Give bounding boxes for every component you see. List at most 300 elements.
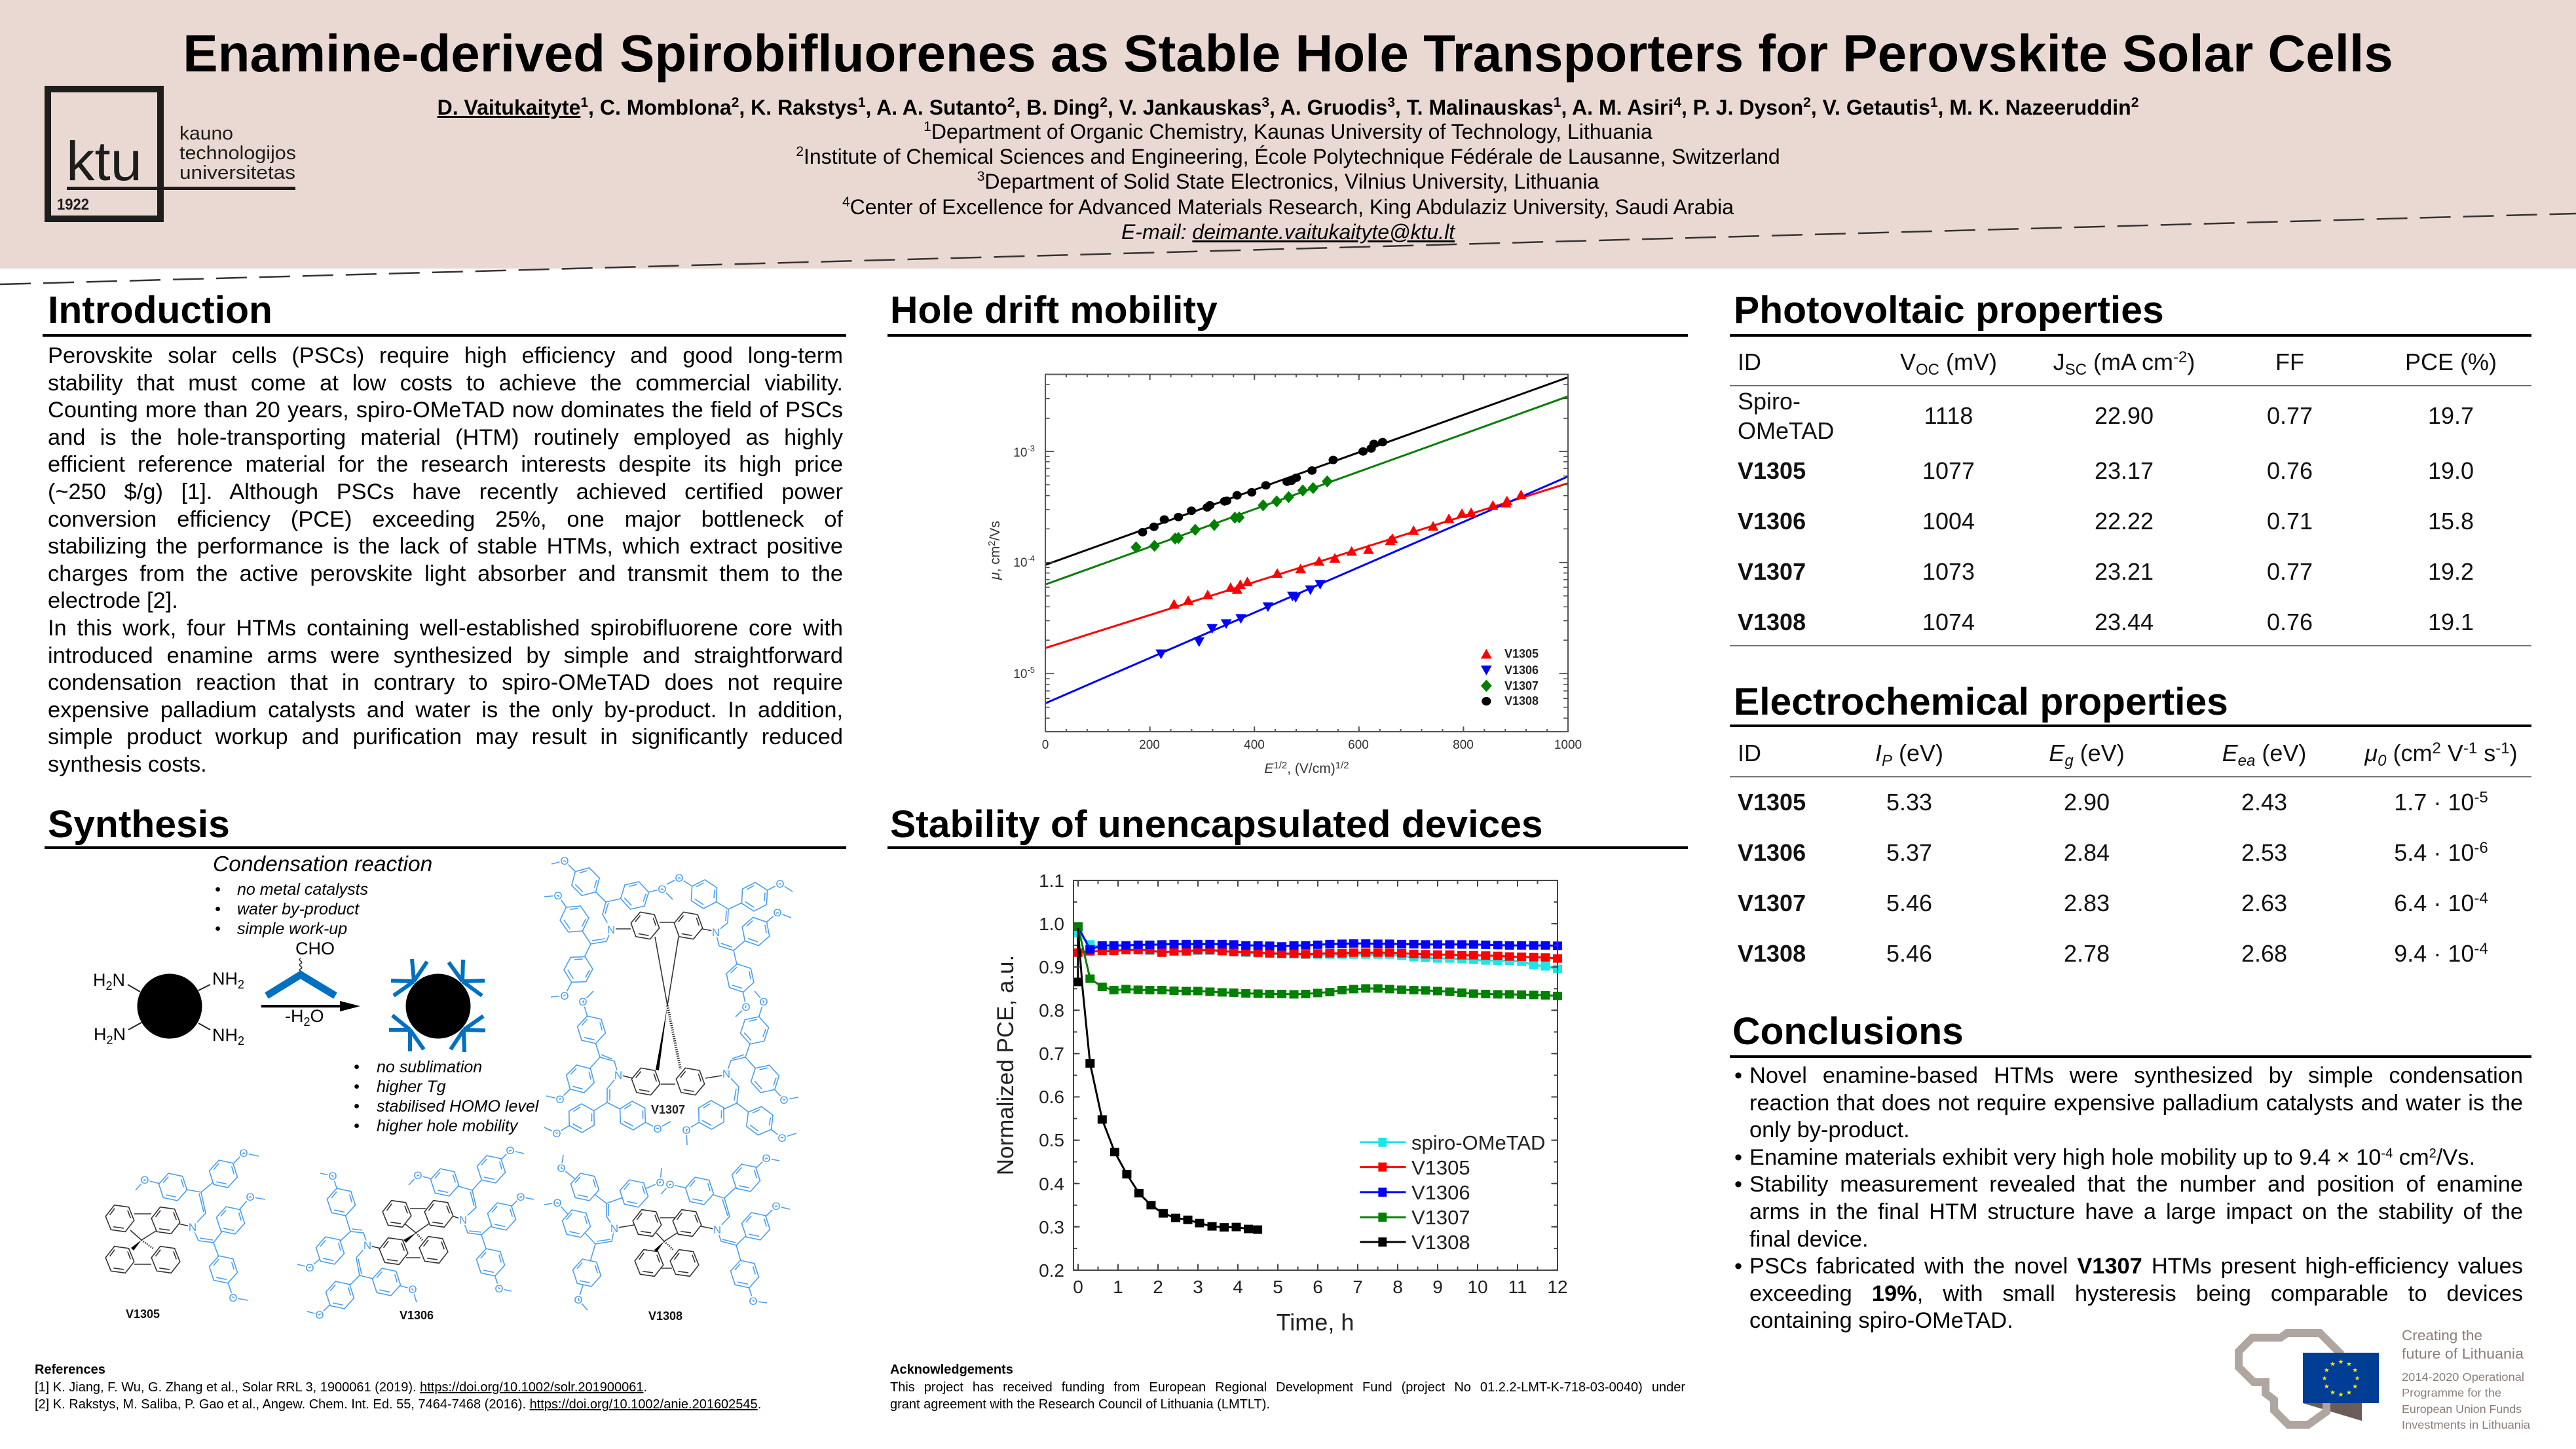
- logo: EU funds: Programme for the: [2402, 1386, 2501, 1399]
- row V1308: 2.68: [2241, 940, 2287, 967]
- series spiro-OMeTAD: [1078, 933, 1558, 969]
- logo: EU funds: [2239, 1327, 2530, 1431]
- axis labels: Normalized PCE, a.u.: [993, 955, 1018, 1175]
- conclusions list: exceeding 19%, with small hysteresis being comparable to devices: [1749, 1281, 2523, 1306]
- introduction text: Counting more than 20 years, spiro-OMeTAD now dominates the field of PSCs: [48, 398, 843, 423]
- product benefits list: •: [354, 1097, 360, 1116]
- product benefits list: stabilised HOMO level: [377, 1097, 540, 1116]
- logo: KTU: technologijos: [179, 143, 296, 164]
- introduction text: (~250 $/g) [1]. Although PSCs have recently achieved certified power: [48, 480, 843, 504]
- reactant: amine core: N: [113, 970, 125, 990]
- molecule: V1305: O: [140, 1174, 149, 1186]
- row V1307: 0.77: [2267, 558, 2313, 585]
- product benefits list: higher hole mobility: [377, 1117, 519, 1135]
- reaction arrow: [261, 1001, 360, 1011]
- reagent label: 2: [304, 1015, 310, 1028]
- table: photovoltaic properties: [1730, 348, 2531, 646]
- product benefits list: •: [354, 1058, 360, 1076]
- molecule: V1306: O: [315, 1309, 324, 1321]
- axis labels: 0.2: [1039, 1260, 1064, 1281]
- reaction benefits list: [215, 880, 368, 938]
- introduction text: introduced enamine arms were synthesized by simple and straightforward: [48, 643, 843, 668]
- axis labels: 12: [1547, 1277, 1568, 1297]
- row V1306: V1306: [1738, 839, 1806, 866]
- molecule: V1308: O: [656, 1176, 665, 1189]
- reaction benefits list: no metal catalysts: [237, 880, 368, 899]
- row spiro-OMeTAD: [1738, 388, 2474, 444]
- axis labels: , (V/cm): [1287, 761, 1335, 776]
- row V1305: 23.17: [2095, 457, 2154, 484]
- introduction text: efficient reference material for the research interests despite its high price: [48, 452, 843, 477]
- header row: I: [1875, 740, 1882, 766]
- introduction text: electrode [2].: [48, 588, 178, 613]
- reactant: amine core: 2: [238, 1034, 244, 1047]
- molecule: V1307: V1307: [651, 1103, 685, 1116]
- molecule: V1306: O: [408, 1283, 417, 1296]
- condensation reaction scheme: [93, 852, 540, 1135]
- row V1308: [1738, 609, 2474, 635]
- row V1308: 2.78: [2064, 940, 2110, 967]
- header row: V: [1900, 348, 1916, 375]
- molecule: V1308: O: [772, 1200, 781, 1213]
- row V1308: 0.76: [2267, 609, 2313, 635]
- axis labels: 1000: [1554, 738, 1582, 752]
- conclusions list: Stability measurement revealed that the number and position of enamine: [1749, 1172, 2523, 1197]
- molecule: V1306: N: [459, 1214, 467, 1226]
- axis labels: 600: [1348, 738, 1369, 752]
- molecule: V1305: N: [189, 1221, 196, 1233]
- header row: (eV): [1892, 740, 1943, 766]
- header row: -1: [2463, 740, 2477, 757]
- reactant: amine core: H: [93, 970, 106, 990]
- axis labels: 1/2: [1273, 760, 1287, 771]
- molecule: V1308: [544, 1152, 790, 1323]
- conclusions list: final device.: [1749, 1227, 1869, 1252]
- header row: ): [2187, 348, 2195, 375]
- heading: Electrochemical properties: Electrochemical properties: [1734, 681, 2228, 723]
- header row: FF: [2275, 348, 2304, 375]
- series V1308: [1078, 928, 1258, 1230]
- acknowledgements: This project has received funding from European Regional Development Fund (project No 01.2.2-LMT-K-718-03-0040) under: [890, 1380, 1685, 1394]
- row V1305: 5.33: [1886, 789, 1932, 816]
- row V1308: V1308: [1738, 940, 1806, 967]
- row V1308: 5.46: [1886, 940, 1932, 967]
- reactant: amine core: [93, 969, 244, 1047]
- reactant: amine core: 2: [238, 978, 244, 991]
- axis labels: 2: [1153, 1277, 1163, 1297]
- logo: KTU: kauno: [179, 123, 233, 144]
- row V1306: 2.53: [2241, 839, 2287, 866]
- reagent label: O: [310, 1006, 324, 1026]
- molecule: V1307: O: [552, 1127, 561, 1140]
- header row: ID: [1738, 740, 1761, 766]
- row V1307: [1738, 558, 2474, 585]
- legend markers: [1485, 654, 1487, 701]
- plot frame: [1045, 375, 1568, 732]
- axis labels: 800: [1453, 738, 1474, 752]
- molecule: V1305: O: [246, 1191, 255, 1203]
- axis labels: 7: [1353, 1277, 1363, 1297]
- axis labels: 0: [1073, 1277, 1083, 1297]
- logo: KTU: [45, 86, 296, 222]
- molecule: V1308: N: [713, 1224, 721, 1236]
- row V1307: 19.2: [2428, 558, 2474, 585]
- row V1306: [1738, 508, 2474, 535]
- references: [2] K. Rakstys, M. Saliba, P. Gao et al., Angew. Chem. Int. Ed. 55, 7464-7468 (2016). https://doi.org/10.1002/anie.201602545.: [35, 1397, 761, 1412]
- header row: ea: [2238, 752, 2255, 770]
- axis labels: 200: [1139, 738, 1160, 752]
- row spiro-OMeTAD: 1118: [1924, 402, 1973, 429]
- molecule: V1308: O: [665, 1178, 675, 1191]
- header row: E: [2049, 740, 2065, 766]
- row V1307: 2.83: [2064, 890, 2110, 916]
- header row: 2: [2433, 740, 2441, 757]
- series V1306: [1078, 926, 1558, 949]
- row V1306: 0.71: [2267, 508, 2313, 535]
- product benefits list: higher Tg: [377, 1078, 446, 1096]
- header row: -2: [2173, 348, 2187, 366]
- row V1305: 19.0: [2428, 457, 2474, 484]
- reagent label: [285, 939, 335, 1028]
- references: [35, 1363, 761, 1412]
- acknowledgements: Acknowledgements: [890, 1363, 1013, 1377]
- axis labels: -4: [1027, 554, 1035, 563]
- header row: (eV): [2255, 740, 2306, 766]
- introduction text: In this work, four HTMs containing well-established spirobifluorene core with: [48, 616, 843, 641]
- legend labels: V1307: [1504, 679, 1539, 692]
- molecule: V1307: O: [682, 1124, 691, 1137]
- axis labels: 0.8: [1039, 1000, 1064, 1021]
- molecule: V1307: O: [658, 883, 667, 895]
- row spiro-OMeTAD: Spiro-: [1738, 388, 1801, 415]
- axis labels: 2: [986, 540, 998, 546]
- molecule: V1306: O: [495, 1283, 504, 1295]
- molecule: V1307: O: [578, 996, 588, 1008]
- conclusions list: reaction that does not require expensive palladium catalysts and water is the: [1749, 1091, 2523, 1116]
- product benefits list: •: [354, 1117, 360, 1135]
- row V1307: 6.4 · 10: [2394, 890, 2474, 916]
- row V1306: -6: [2474, 839, 2488, 857]
- row V1305: 2.43: [2241, 789, 2287, 816]
- header row: P: [1882, 752, 1892, 770]
- product benefits list: •: [354, 1078, 360, 1096]
- heading rules: [43, 334, 2531, 1058]
- axis labels: /Vs: [988, 521, 1003, 540]
- affiliation 4: 4Center of Excellence for Advanced Materials Research, King Abdulaziz University, Saudi Arabia: [842, 195, 1734, 219]
- row V1305: 1.7 · 10: [2394, 789, 2474, 816]
- reactant: amine core: NH: [212, 1025, 238, 1045]
- axis labels: 3: [1193, 1277, 1203, 1297]
- legend line keys: [1360, 1138, 1406, 1247]
- header row: E: [2222, 740, 2239, 766]
- reaction benefits list: simple work-up: [237, 920, 347, 938]
- axis labels: 400: [1244, 738, 1265, 752]
- contact e-mail: E-mail: deimante.vaitukaityte@ktu.lt: [1121, 220, 1455, 244]
- axis labels: 1: [1113, 1277, 1123, 1297]
- molecule: V1307: O: [560, 990, 569, 1002]
- header row: [1738, 348, 2497, 379]
- molecule: V1307: N: [607, 924, 615, 936]
- molecule: V1306: N: [364, 1239, 371, 1252]
- row spiro-OMeTAD: 22.90: [2095, 402, 2154, 429]
- axis labels: 1.1: [1039, 871, 1064, 891]
- axis labels: 0.4: [1039, 1174, 1064, 1194]
- acknowledgements: [890, 1363, 1685, 1412]
- axis labels: Time, h: [1277, 1309, 1354, 1336]
- row V1305: V1305: [1738, 457, 1806, 484]
- axis labels: [993, 871, 1568, 1336]
- heading: Photovoltaic properties: Photovoltaic properties: [1734, 289, 2164, 331]
- references: References: [35, 1363, 105, 1377]
- product benefits list: [354, 1058, 540, 1135]
- molecule: V1306: O: [413, 1169, 422, 1182]
- reagent label: CHO: [295, 939, 335, 958]
- molecule: V1306: O: [506, 1144, 515, 1157]
- data points V1306: [1161, 584, 1320, 654]
- axis labels: μ, cm: [988, 546, 1003, 580]
- axis labels: E: [1264, 761, 1274, 776]
- molecule: V1307: O: [741, 1001, 751, 1013]
- molecule: V1307: O: [653, 1123, 662, 1135]
- molecule: V1308: O: [553, 1197, 562, 1209]
- authors: D. Vaitukaityte1, C. Momblona2, K. Rakstys1, A. A. Sutanto2, B. Ding2, V. Jankauskas3, A. Gruodis3, T. Malinauskas1, A. M. Asiri4, P. J. Dyson2, V. Getautis1, M. K. Nazeeruddin2: [438, 95, 2138, 119]
- molecule: V1308: O: [557, 1162, 566, 1175]
- logo: EU funds: 2014-2020 Operational: [2402, 1370, 2524, 1383]
- legend labels: V1305: [1411, 1156, 1470, 1179]
- row V1308: -4: [2474, 940, 2488, 958]
- row V1306: V1306: [1738, 508, 1806, 535]
- legend labels: V1306: [1411, 1181, 1470, 1204]
- axis labels: 0.5: [1039, 1130, 1064, 1150]
- row V1305: 2.90: [2064, 789, 2110, 816]
- introduction text: synthesis costs.: [48, 752, 207, 777]
- conclusions list: [1735, 1063, 2523, 1333]
- row V1308: [1738, 940, 2488, 967]
- axis labels: 11: [1508, 1277, 1527, 1297]
- header row: (eV): [2074, 740, 2125, 766]
- row V1308: 9.4 · 10: [2394, 940, 2474, 967]
- introduction text: simple product workup and purification may result in significantly reduced: [48, 724, 843, 749]
- reaction benefits list: water by-product: [237, 900, 360, 918]
- axis labels: 8: [1392, 1277, 1403, 1297]
- row V1305: 1077: [1922, 457, 1975, 484]
- legend labels: [1411, 1131, 1545, 1254]
- axis labels: 5: [1273, 1277, 1283, 1297]
- axis labels: 9: [1432, 1277, 1443, 1297]
- axis labels: 10: [1013, 446, 1027, 460]
- reactant: amine core: 2: [106, 1034, 113, 1047]
- row V1307: [1738, 890, 2488, 916]
- dashed divider line: [0, 214, 2576, 284]
- reaction benefits list: •: [215, 880, 221, 899]
- molecule: V1308: V1308: [648, 1309, 682, 1323]
- row V1307: 1073: [1922, 558, 1975, 585]
- reaction title: Condensation reaction: [213, 852, 432, 876]
- reagent label: -H: [285, 1006, 304, 1026]
- conclusions list: only by-product.: [1749, 1118, 1910, 1142]
- row V1307: 5.46: [1886, 890, 1932, 916]
- molecule: V1305: [104, 1147, 265, 1321]
- molecule: V1307: N: [722, 1068, 730, 1080]
- molecule: V1306: O: [328, 1170, 337, 1182]
- conclusions list: containing spiro-OMeTAD.: [1749, 1308, 2013, 1333]
- molecule: V1307: O: [775, 878, 785, 890]
- molecule: V1307: O: [779, 1094, 789, 1106]
- header row: μ: [2364, 740, 2378, 766]
- affiliation 1: 1Department of Organic Chemistry, Kaunas University of Technology, Lithuania: [924, 119, 1652, 143]
- header row: V: [2441, 740, 2463, 766]
- axis labels: 0.9: [1039, 957, 1064, 977]
- axis labels: 10: [1013, 556, 1027, 570]
- introduction text: Perovskite solar cells (PSCs) require high efficiency and good long-term: [48, 343, 843, 368]
- molecule: V1308: O: [574, 1294, 583, 1306]
- series V1305: [1078, 950, 1558, 958]
- legend labels: V1306: [1504, 664, 1539, 677]
- axis labels: 6: [1313, 1277, 1323, 1297]
- header row: OC: [1916, 361, 1939, 379]
- row V1308: 1074: [1922, 609, 1975, 635]
- product: enamine core: [389, 959, 485, 1052]
- logo: EU funds: European Union Funds: [2402, 1402, 2522, 1416]
- conclusions list: arms in the final HTM structure have a large impact on the stability of the: [1749, 1199, 2523, 1224]
- axis labels: 4: [1233, 1277, 1243, 1297]
- logo: EU funds: Creating the: [2402, 1327, 2482, 1344]
- header row: s: [2477, 740, 2495, 766]
- logo: KTU: 1922: [57, 196, 89, 214]
- molecule: V1308: O: [762, 1152, 771, 1165]
- header row: (mA cm: [2087, 348, 2173, 375]
- reaction benefits list: •: [215, 900, 221, 918]
- aldehyde chevron: [267, 958, 335, 996]
- affiliation 2: 2Institute of Chemical Sciences and Engineering, École Polytechnique Fédérale de Lausanne, Switzerland: [796, 144, 1780, 168]
- header row: SC: [2065, 361, 2087, 379]
- molecule: V1307: O: [555, 1093, 565, 1106]
- header row: ID: [1738, 348, 1761, 375]
- row V1308: 19.1: [2428, 609, 2474, 635]
- legend labels: V1305: [1504, 647, 1539, 660]
- heading: Hole drift mobility: Hole drift mobility: [890, 289, 1218, 331]
- molecule: V1307: [544, 855, 798, 1145]
- introduction text: [48, 343, 844, 777]
- header row: [1738, 740, 2518, 770]
- molecule: V1307: O: [777, 1132, 787, 1144]
- header band: [0, 0, 2576, 269]
- legend labels: V1308: [1411, 1231, 1470, 1254]
- header row: -1: [2495, 740, 2510, 757]
- chart: hole drift mobility: [986, 374, 1582, 776]
- reactant: amine core: 2: [106, 979, 113, 992]
- product benefits list: no sublimation: [377, 1058, 482, 1076]
- conclusions list: Novel enamine-based HTMs were synthesized by simple condensation: [1749, 1063, 2523, 1088]
- log y minor ticks: [1045, 374, 1568, 718]
- row V1306: [1738, 839, 2488, 866]
- heading: Synthesis: Synthesis: [48, 803, 230, 846]
- logo: EU funds: Investments in Lithuania: [2402, 1418, 2530, 1431]
- reactant: amine core: NH: [212, 969, 238, 988]
- row V1305: V1305: [1738, 789, 1806, 816]
- chart: stability: [993, 871, 1568, 1336]
- data points V1305: [1174, 495, 1521, 604]
- logo: EU funds: future of Lithuania: [2402, 1346, 2524, 1362]
- row V1307: 2.63: [2241, 890, 2287, 916]
- reaction benefits list: •: [215, 920, 221, 938]
- molecule: V1305: O: [239, 1147, 248, 1159]
- introduction text: and is the hole-transporting material (HTM) routinely employed as highly: [48, 425, 843, 450]
- axis labels: 10: [1013, 668, 1027, 681]
- row spiro-OMeTAD: OMeTAD: [1738, 417, 1834, 444]
- molecule: V1306: V1306: [400, 1309, 434, 1322]
- axis labels: 0.6: [1039, 1087, 1064, 1107]
- header row: (cm: [2387, 740, 2433, 766]
- row V1308: 23.44: [2095, 609, 2154, 635]
- molecule: V1305: V1305: [126, 1308, 160, 1321]
- reactant: amine core: N: [113, 1025, 126, 1044]
- acknowledgements: grant agreement with the Research Council of Lithuania (LMTLT).: [890, 1397, 1270, 1412]
- molecule: V1307: N: [614, 1069, 622, 1082]
- axis labels: -3: [1027, 443, 1035, 453]
- table: electrochemical properties: [1730, 740, 2531, 967]
- row V1305: [1738, 789, 2488, 816]
- legend labels: V1307: [1411, 1206, 1470, 1229]
- legend labels: spiro-OMeTAD: [1411, 1131, 1545, 1154]
- data points V1307: [1136, 481, 1327, 548]
- logo: KTU: universitetas: [179, 162, 295, 183]
- header row: (mV): [1939, 348, 1997, 375]
- row V1305: [1738, 457, 2474, 484]
- axis labels: 0: [1042, 738, 1049, 752]
- header row: PCE (%): [2405, 348, 2497, 375]
- row V1308: V1308: [1738, 609, 1806, 635]
- fit lines: [1045, 377, 1568, 704]
- axis labels: 0.7: [1039, 1044, 1064, 1064]
- introduction text: stability that must come at low costs to achieve the commercial viability.: [48, 371, 843, 396]
- introduction text: charges from the active perovskite light absorber and transmit them to the: [48, 561, 843, 586]
- heading: Stability of unencapsulated devices: Stability of unencapsulated devices: [890, 803, 1543, 846]
- row spiro-OMeTAD: 19.7: [2428, 402, 2474, 429]
- row V1306: 5.37: [1886, 839, 1932, 866]
- reactant: amine core: H: [94, 1025, 106, 1044]
- legend labels: V1308: [1504, 694, 1539, 707]
- molecule: V1307: O: [759, 996, 768, 1008]
- molecule: V1308: N: [610, 1222, 618, 1235]
- row V1305: 0.76: [2267, 457, 2313, 484]
- conclusions list: Enamine materials exhibit very high hole mobility up to 9.4 × 10-4 cm2/Vs.: [1749, 1145, 2475, 1170]
- conclusions list: PSCs fabricated with the novel V1307 HTMs present high-efficiency values: [1749, 1254, 2523, 1279]
- row V1306: 22.22: [2095, 508, 2154, 535]
- heading: Introduction: Introduction: [48, 289, 272, 331]
- molecule: V1306: O: [305, 1262, 314, 1274]
- header row: 0: [2378, 752, 2387, 770]
- title: Enamine-derived Spirobifluorenes as Stable Hole Transporters for Perovskite Solar Cells: [183, 24, 2393, 83]
- series V1307: [1078, 926, 1558, 996]
- logo: KTU: ktu: [66, 130, 142, 192]
- data points V1308: [1142, 442, 1383, 532]
- molecule: V1307: O: [675, 872, 684, 884]
- axis labels: -5: [1027, 665, 1035, 675]
- row spiro-OMeTAD: 0.77: [2267, 402, 2313, 429]
- axis labels: 1.0: [1039, 914, 1064, 934]
- series V1308 markers: [1078, 982, 1258, 1230]
- row V1305: -5: [2474, 789, 2488, 806]
- legend labels: [1504, 647, 1539, 707]
- introduction text: conversion efficiency (PCE) exceeding 25%, one major bottleneck of: [48, 507, 843, 532]
- molecule: V1307: O: [560, 855, 569, 867]
- row V1306: 5.4 · 10: [2394, 839, 2474, 866]
- molecule: V1307: O: [553, 890, 563, 902]
- molecule: V1307: O: [773, 907, 782, 919]
- affiliation 3: 3Department of Solid State Electronics, Vilnius University, Lithuania: [977, 169, 1599, 193]
- row V1306: 2.84: [2064, 839, 2110, 866]
